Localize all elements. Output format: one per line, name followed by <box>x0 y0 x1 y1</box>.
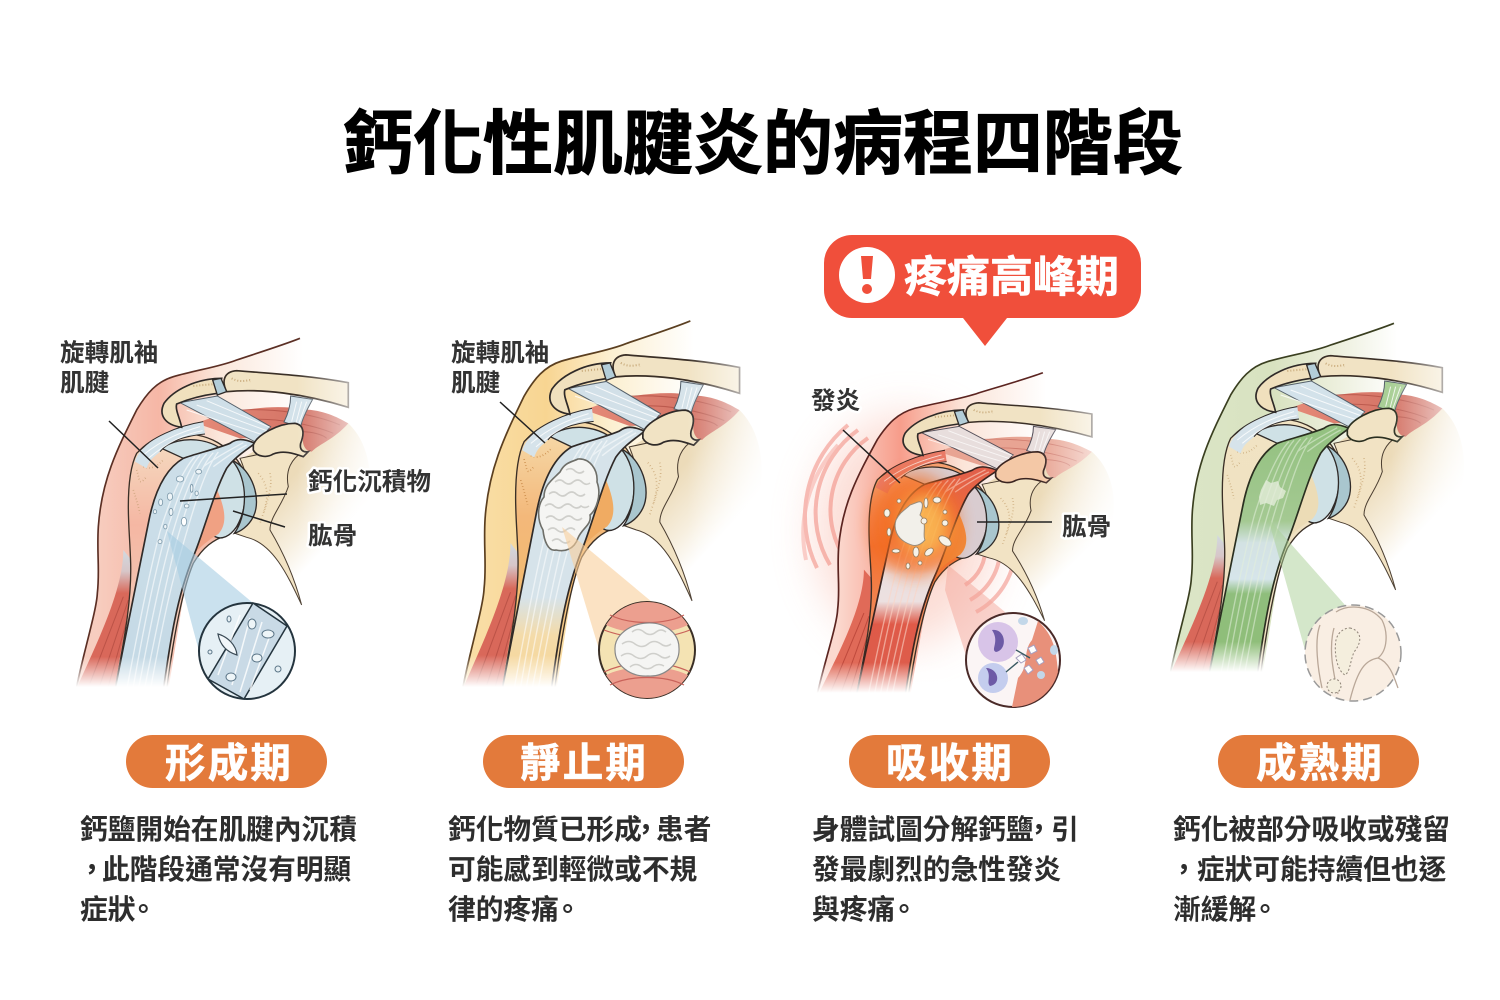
stage 3 description: 引 <box>1051 814 1079 845</box>
stage 2 heading: 靜止期 <box>520 740 648 786</box>
stage 1 description: ， <box>78 854 106 885</box>
callout text: 疼痛高峰期 <box>904 254 1119 302</box>
stage 1 heading <box>126 735 327 788</box>
calcium droplets <box>153 469 202 544</box>
label: rotator cuff tendon: 旋轉肌袖 <box>60 340 158 367</box>
panel: stage 4 mature shoulder illustration <box>1154 315 1477 701</box>
stage 4 description: ， <box>1170 854 1198 885</box>
shoulder anatomy <box>60 330 383 703</box>
glowing centre <box>901 495 949 555</box>
calcium fragments <box>884 497 953 569</box>
stage 2 description: 鈣化物質已形成 <box>448 814 642 845</box>
calcium deposit <box>539 459 599 551</box>
shock wave arcs <box>803 425 1015 612</box>
inset: deposit cross-section <box>599 602 695 698</box>
hot zone <box>871 473 959 577</box>
stage 4 heading: 成熟期 <box>1256 740 1384 786</box>
deposit texture <box>545 469 590 543</box>
stage 3 description: 。 <box>890 894 918 925</box>
stage 1 description: 症狀 <box>80 894 136 925</box>
title: 鈣化性肌腱炎的病程四階段 <box>343 105 1183 183</box>
inset: immune cells <box>966 613 1060 707</box>
leader lines <box>843 430 1052 522</box>
icon: exclamation <box>839 247 895 303</box>
stage 2 description: 。 <box>554 894 581 925</box>
shoulder anatomy <box>800 365 1127 709</box>
stage 2 heading <box>483 735 684 788</box>
label: calcific deposit: 鈣化沉積物 <box>308 468 431 496</box>
stage 3 description: ， <box>1025 814 1053 845</box>
label: inflammation: 發炎 <box>811 387 860 415</box>
stage 1 description: 此階段通常沒有明顯 <box>102 854 352 885</box>
shoulder anatomy <box>446 312 775 704</box>
stage 1 description: 。 <box>129 894 157 925</box>
stage 3 description: 身體試圖分解鈣鹽 <box>812 814 1034 845</box>
stage 4 description: 。 <box>1251 894 1279 925</box>
stage 1 description: 鈣鹽開始在肌腱內沉積 <box>80 814 357 845</box>
stage 2 description: 可能感到輕微或不規 <box>448 854 698 885</box>
leader lines <box>109 421 287 527</box>
callout: peak pain period <box>824 235 1141 346</box>
stage 1 heading: 形成期 <box>165 740 293 786</box>
inflammation glow <box>815 415 995 645</box>
zoom cone <box>1268 518 1345 650</box>
zoom cone <box>167 531 253 655</box>
stage 2 description: 患者 <box>656 814 711 845</box>
stage 4 heading <box>1218 735 1419 788</box>
stage 4 description: 症狀可能持續但也逐 <box>1197 854 1447 885</box>
stage 2 description: ， <box>632 814 660 845</box>
label: rotator cuff tendon: 肌腱 <box>451 369 501 397</box>
stage 3 heading: 吸收期 <box>886 740 1014 786</box>
inset: recovered shoulder <box>1305 605 1401 701</box>
stage 3 description: 發最劇烈的急性發炎 <box>812 854 1061 885</box>
residual calcium <box>1259 480 1286 506</box>
inset: calcium crystals in tendon <box>199 603 295 699</box>
zoom cone <box>945 565 1005 668</box>
label: humerus: 肱骨 <box>308 522 357 550</box>
label: humerus: 肱骨 <box>1062 513 1111 541</box>
panel: stage 2 resting shoulder illustration <box>446 312 775 704</box>
stage 3 heading <box>849 735 1050 788</box>
panel: stage 1 formation shoulder illustration <box>60 330 431 703</box>
label: rotator cuff tendon: 肌腱 <box>60 369 110 397</box>
leader line <box>500 402 545 443</box>
stage 2 description: 律的疼痛 <box>448 894 559 925</box>
zoom cone <box>562 527 652 656</box>
label: rotator cuff tendon: 旋轉肌袖 <box>451 340 549 367</box>
stage 3 description: 與疼痛 <box>812 894 895 925</box>
shoulder anatomy <box>1154 315 1477 688</box>
stage 4 description: 鈣化被部分吸收或殘留 <box>1173 814 1450 845</box>
ruptured calcium deposit <box>895 502 925 546</box>
stage 4 description: 漸緩解 <box>1173 894 1256 925</box>
panel: stage 3 resorptive shoulder illustration <box>800 365 1127 709</box>
